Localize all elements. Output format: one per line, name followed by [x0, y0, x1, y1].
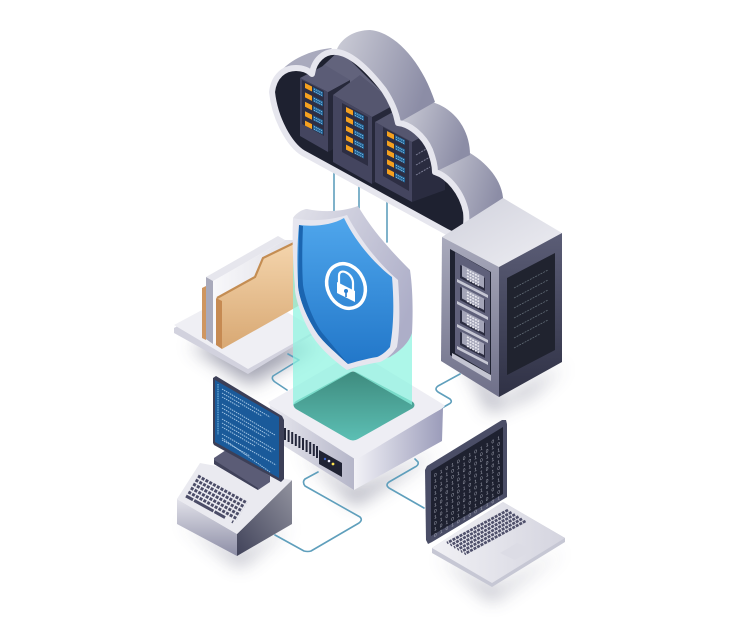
tray	[174, 290, 317, 374]
cloud back lobe large	[336, 30, 435, 123]
cloud back lobe left	[280, 48, 332, 74]
server rack 2	[333, 75, 396, 184]
shield face	[297, 218, 393, 364]
panel: base device	[270, 353, 443, 490]
cloud front rim	[272, 52, 466, 235]
white paper	[213, 240, 300, 344]
vent slots	[285, 428, 317, 458]
binary digits: 0 1 0 1 0 1 0 0 1 1 0 1	[434, 495, 500, 539]
tower top	[442, 198, 562, 267]
code lines	[218, 384, 276, 472]
cloud back lobe middle	[398, 102, 470, 172]
binary digits: 1 0 1 0 1 1 0 1 0 0 1 0	[434, 441, 500, 485]
terminal front face	[177, 499, 237, 556]
folder front	[217, 240, 300, 349]
cloud back lobe right	[430, 151, 503, 234]
laptop screen	[431, 427, 503, 536]
terminal side face	[237, 480, 292, 556]
base left face	[270, 405, 356, 490]
cloud interior with racks	[275, 54, 464, 231]
icon: lock in circle	[320, 257, 372, 315]
trackpad	[500, 543, 533, 560]
base top	[270, 353, 443, 458]
binary digits: 0 1 0 1 0 0 1 0 1 1 0 1	[434, 435, 500, 479]
binary digits	[434, 435, 500, 539]
monitor stand	[214, 450, 270, 490]
panel: terminal computer	[177, 376, 292, 556]
terminal keyboard surface	[177, 463, 292, 534]
status panel	[319, 450, 342, 477]
binary digits: 0 1 0 1 0 1 1 0 1 0 1 0	[434, 471, 500, 515]
laptop lid	[425, 420, 507, 544]
tower drive bays	[457, 265, 488, 365]
panel: cloud with servers	[265, 30, 503, 240]
shield extrusion	[293, 206, 413, 370]
monitor body	[213, 376, 284, 482]
panel: shield	[293, 206, 413, 370]
isometric cloud security illustration	[174, 30, 565, 608]
server rack 1	[300, 65, 350, 152]
shield rim	[293, 215, 399, 370]
binary digits: 1 0 0 1 0 1 0 1 1 0 1 0	[434, 453, 500, 497]
connector lines	[272, 165, 460, 552]
monitor screen	[215, 380, 279, 478]
panel: laptop	[425, 420, 565, 587]
binary digits: 1 0 1 0 0 1 0 1 0 1 1 0	[434, 465, 500, 509]
base right face	[354, 408, 443, 490]
panel: folder on tray	[174, 236, 317, 374]
binary digits: 0 1 0 0 1 1 0 1 0 1 0 0	[434, 483, 500, 527]
server rack 3	[375, 108, 445, 202]
tower inner recess	[450, 249, 491, 380]
soft ground shadows	[180, 340, 565, 600]
binary digits: 1 0 1 0 1 0 1 1 0 0 1 0	[434, 489, 500, 533]
binary digits: 0 1 0 1 1 0 1 0 1 0 0 1	[434, 459, 500, 503]
keyboard keys	[186, 476, 247, 523]
laptop base underside	[432, 502, 565, 587]
binary digits: 0 1 1 0 1 0 1 0 0 1 0 1	[434, 447, 500, 491]
laptop keys	[447, 510, 526, 554]
back flap	[202, 286, 206, 340]
teal pad	[294, 372, 414, 440]
panel: server tower	[441, 198, 562, 397]
laptop base top	[432, 502, 565, 583]
binary digits: 1 0 1 1 0 0 1 0 1 0 1 1	[434, 477, 500, 521]
light beam	[293, 250, 412, 405]
tower side screen	[507, 253, 555, 375]
tower right face	[499, 233, 562, 397]
tower left face	[441, 237, 499, 397]
